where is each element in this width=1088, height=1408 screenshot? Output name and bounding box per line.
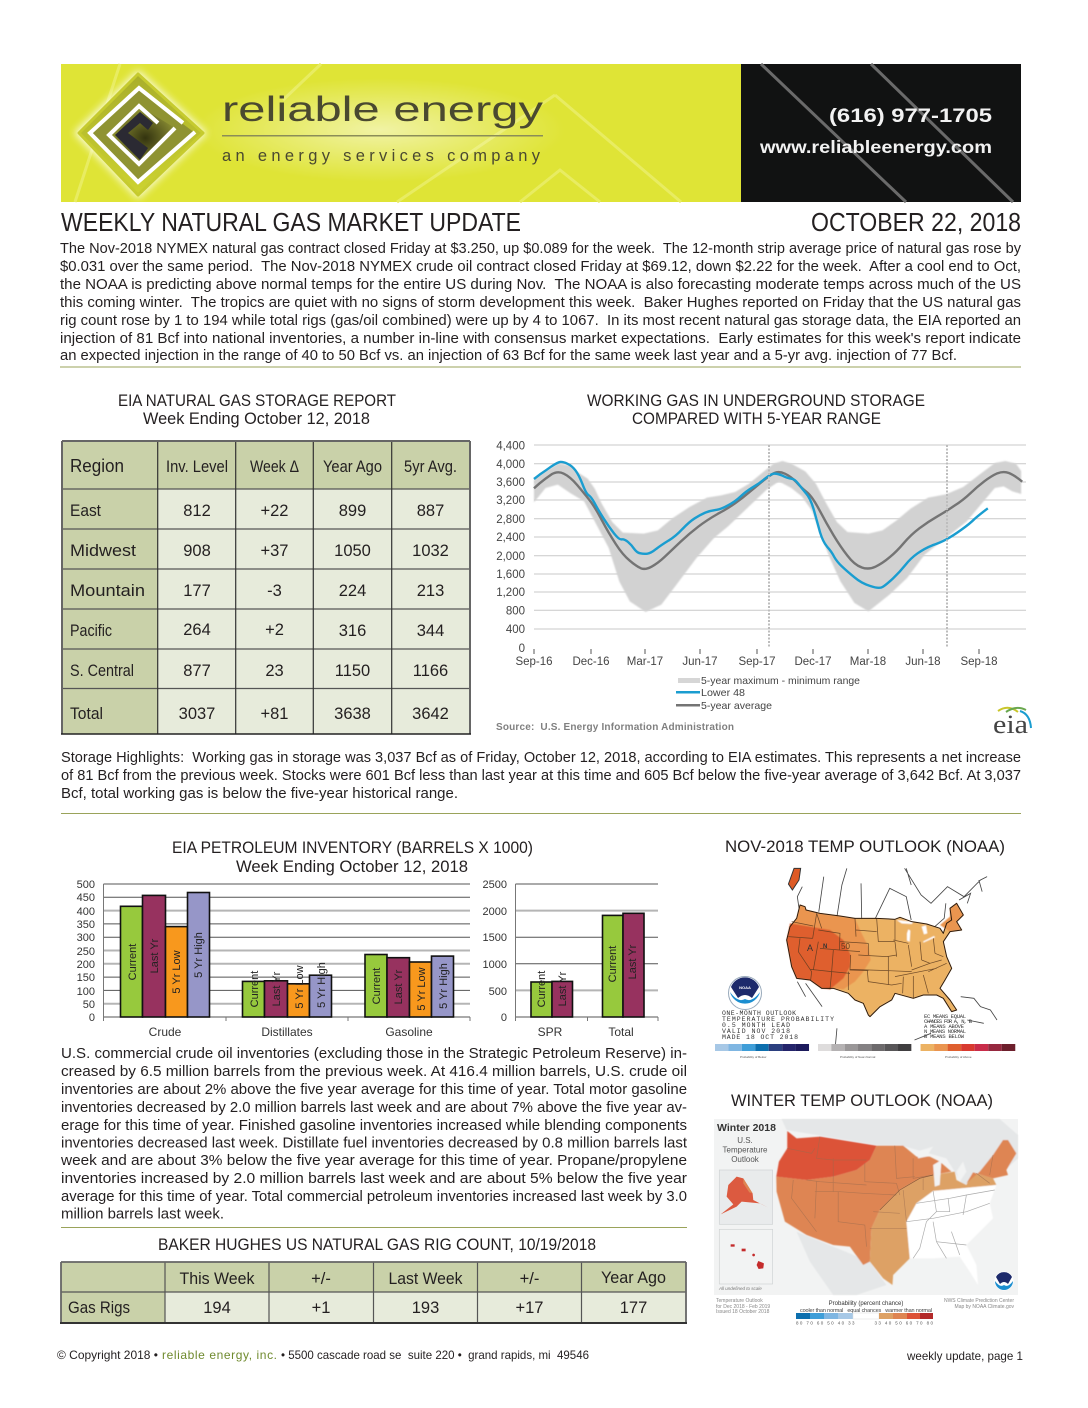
- bar chart: crude, distillates, gasoline: 200: [77, 959, 95, 971]
- table: storage by region: 177: [183, 582, 211, 600]
- icon: NOAA logo: [728, 976, 762, 1010]
- table: storage by region: Total: [70, 704, 103, 723]
- table: rig count: This Week: [180, 1270, 255, 1288]
- line chart: working gas vs 5-year range: Mar-18: [850, 656, 886, 668]
- table: rig count: +/-: [311, 1270, 331, 1288]
- petroleum commentary paragraph: U.S. commercial crude oil inventories (excluding those in the Strategic Petroleum Reserve) in-: [61, 1045, 687, 1062]
- bar chart: SPR and total: 1000: [483, 959, 507, 971]
- bar chart: crude, distillates, gasoline: Last Yr: [393, 969, 405, 1004]
- petroleum commentary paragraph: inventories decreased last week. Distillate fuel inventories decreased by 0.8 million barrels last: [61, 1134, 688, 1152]
- heading: rig count: BAKER HUGHES US NATURAL GAS RIG COUNT, 10/19/2018: [158, 1235, 596, 1254]
- map caption: TEMPERATURE PROBABILITY: [722, 1016, 834, 1023]
- table: rig count: +/-: [520, 1270, 539, 1288]
- line chart: working gas vs 5-year range: [496, 440, 1031, 739]
- line chart: working gas vs 5-year range: 400: [506, 624, 525, 636]
- heading: storage report: Week Ending October 12, 2018: [143, 409, 370, 428]
- table: rig count: Year Ago: [601, 1269, 666, 1287]
- bar chart: crude, distillates, gasoline: 5 Yr Low: [171, 950, 183, 994]
- bar chart: crude, distillates, gasoline: 5 Yr High: [438, 963, 450, 1009]
- contact panel: [741, 64, 1021, 202]
- table: storage by region: +22: [260, 502, 288, 520]
- probability scale: [796, 1301, 933, 1326]
- heading: working gas chart: COMPARED WITH 5-YEAR RANGE: [632, 409, 881, 428]
- line chart: working gas vs 5-year range: Dec-16: [572, 656, 610, 668]
- map title: Winter 2018: [717, 1122, 776, 1134]
- petroleum commentary paragraph: inventories are about 2% above the five year average for this time of year. Total motor gasoline: [61, 1081, 687, 1098]
- table: storage by region: East: [70, 501, 101, 520]
- table: storage by region: Midwest: [70, 541, 136, 560]
- table: rig count: Gas Rigs: [68, 1299, 130, 1317]
- table: storage by region: 1050: [334, 542, 371, 560]
- intro paragraph: injection of 81 Bcf into national inventories, a number in-line with consensus market expectations. Early estimates for this week's report indicate: [60, 330, 1021, 347]
- line chart: working gas vs 5-year range: Sep-18: [960, 656, 998, 668]
- line chart: working gas vs 5-year range: 2,800: [496, 514, 525, 526]
- table: storage by region: 316: [339, 622, 366, 640]
- map: November temperature outlook: [715, 868, 1015, 1059]
- map: November temperature outlook: 50: [841, 942, 850, 951]
- map key: EC MEANS EQUAL: [924, 1013, 966, 1020]
- map: November temperature outlook: A: [807, 943, 813, 953]
- table: storage by region: 224: [339, 582, 366, 600]
- bar chart: SPR and total: 500: [489, 986, 507, 998]
- petroleum commentary paragraph: creased by 6.5 million barrels from the previous week. At 416.4 million barrels, U.S. crude oil: [61, 1063, 687, 1080]
- storage highlights paragraph: Storage Highlights: Working gas in storage was 3,037 Bcf as of Friday, October 12, 2018, according to EIA estimates. This represents a net increase: [61, 749, 1021, 766]
- footer: copyright and address: © Copyright 2018 •: [57, 1348, 158, 1362]
- table: rig count: 194: [203, 1299, 231, 1317]
- line chart: working gas vs 5-year range: 0: [519, 643, 525, 655]
- table: storage by region: 264: [183, 621, 211, 639]
- map title: Temperature: [723, 1146, 768, 1154]
- table: storage by region: -3: [267, 582, 282, 600]
- bar chart: crude, distillates, gasoline: 5 Yr Low: [294, 965, 306, 1009]
- table: rig count: +17: [516, 1299, 544, 1317]
- map key: N MEANS NORMAL: [924, 1028, 966, 1035]
- table: storage by region: +37: [260, 542, 288, 560]
- bar chart: SPR and total: [483, 879, 658, 1039]
- probability scale: 80 70 60 50 40 33 33 40 50 60 70 80: [796, 1320, 933, 1326]
- bar chart: crude, distillates, gasoline: Last Yr: [149, 938, 161, 973]
- chart legend: [676, 675, 860, 712]
- intro paragraph: an expected injection in the range of 40 to 50 Bcf vs. an injection of 63 Bcf for the same week last year and a 5-yr avg. injection of 77 Bcf.: [60, 347, 957, 364]
- bar chart: SPR and total: 0: [501, 1012, 507, 1024]
- heading: storage report: EIA NATURAL GAS STORAGE REPORT: [118, 391, 396, 410]
- bar chart: SPR and total: Total: [608, 1025, 634, 1039]
- bar chart: SPR and total: 1500: [483, 932, 507, 944]
- intro paragraph: $0.031 over the same period. The Nov-2018 NYMEX crude oil contract closed Friday at $69.12, down $2.22 for the week. After a cool end to Oct,: [60, 258, 1021, 275]
- bar chart: crude, distillates, gasoline: Distillates: [261, 1025, 313, 1039]
- line chart: working gas vs 5-year range: 1,600: [496, 569, 525, 581]
- table: rig count: Last Week: [388, 1270, 463, 1288]
- line chart: working gas vs 5-year range: Mar-17: [627, 656, 663, 668]
- petroleum commentary paragraph: average for this time of year. Total commercial petroleum inventories increased last week by 3.0: [61, 1188, 687, 1205]
- table: storage by region: [61, 441, 471, 734]
- map title: [717, 1122, 776, 1291]
- petroleum commentary paragraph: week and are about 3% below the five year average for this time of year. Propane/propylene: [60, 1152, 687, 1169]
- heading: petroleum inventory: Week Ending October 12, 2018: [236, 857, 468, 876]
- company name: reliable energy: [222, 90, 544, 129]
- map caption: [722, 1010, 834, 1041]
- heading: winter outlook: WINTER TEMP OUTLOOK (NOAA): [731, 1091, 993, 1110]
- map caption: MADE 18 OCT 2018: [722, 1034, 798, 1041]
- petroleum commentary paragraph: [60, 1045, 688, 1222]
- table: storage by region: +81: [260, 705, 288, 723]
- website: www.reliableenergy.com: [759, 137, 992, 157]
- table: storage by region: +2: [265, 621, 284, 639]
- line chart: working gas vs 5-year range: 3,600: [496, 477, 525, 489]
- table: storage by region: Week Δ: [250, 458, 299, 476]
- table: storage by region: 213: [417, 582, 444, 600]
- table: storage by region: 3638: [334, 705, 371, 723]
- table: storage by region: Pacific: [70, 621, 112, 640]
- header banner: [61, 64, 741, 202]
- bar chart: crude, distillates, gasoline: 0: [89, 1012, 95, 1024]
- table: storage by region: 1032: [412, 542, 449, 560]
- line chart: working gas vs 5-year range: 1,200: [496, 587, 525, 599]
- bar chart: crude, distillates, gasoline: 5 Yr Low: [416, 967, 428, 1011]
- table: storage by region: 5yr Avg.: [404, 458, 457, 476]
- map: winter temperature outlook: [714, 1119, 1018, 1326]
- icon: eia logo: eia: [993, 710, 1029, 739]
- bar chart: SPR and total: 2000: [483, 906, 507, 918]
- table: rig count: 177: [620, 1299, 647, 1317]
- date: OCTOBER 22, 2018: [811, 207, 1021, 237]
- heading: storage report: [118, 391, 396, 428]
- bar chart: crude, distillates, gasoline: 400: [77, 906, 95, 918]
- probability colour bar: Probability of Above: [945, 1055, 972, 1059]
- probability scale: cooler than normal equal chances warmer than normal: [800, 1308, 932, 1314]
- petroleum commentary paragraph: million barrels last week.: [61, 1206, 224, 1222]
- bar chart: SPR and total: SPR: [538, 1025, 563, 1039]
- table: storage by region: 3642: [412, 705, 449, 723]
- bar chart: crude, distillates, gasoline: Current: [371, 968, 383, 1004]
- map key: [924, 1013, 973, 1040]
- map caption: 0.5 MONTH LEAD: [722, 1022, 790, 1029]
- footer: copyright and address: • 5500 cascade road se suite 220 • grand rapids, mi 49546: [281, 1348, 589, 1362]
- line chart: working gas vs 5-year range: Dec-17: [794, 656, 832, 668]
- intro paragraph: The Nov-2018 NYMEX natural gas contract closed Friday at $3.250, up $0.089 for the week. The 12-month strip average price of natural gas rose by: [60, 240, 1021, 257]
- intro paragraph: this coming winter. The tropics are quiet with no signs of storm development this week. Baker Hughes reported on Friday that the US natural gas: [60, 294, 1021, 311]
- bar chart: crude, distillates, gasoline: [77, 879, 470, 1039]
- intro paragraph: rig count rose by 1 to 194 while total rigs (gas/oil combined) were up by 4 to 1067. In its most recent natural gas storage data, the EIA reported an: [60, 312, 1021, 329]
- bar chart: crude, distillates, gasoline: 5 Yr High: [316, 962, 328, 1008]
- table: storage by region: Region: [70, 456, 124, 476]
- table: storage by region: 344: [417, 622, 444, 640]
- footer: copyright and address: [57, 1348, 589, 1362]
- probability colour bar: [715, 1044, 1015, 1059]
- bar chart: SPR and total: 2500: [483, 879, 507, 891]
- line chart: working gas vs 5-year range: Sep-16: [515, 656, 553, 668]
- table: storage by region: 1150: [335, 662, 370, 680]
- line chart: working gas vs 5-year range: Jun-17: [682, 656, 718, 668]
- map title: Outlook: [731, 1155, 760, 1164]
- table: storage by region: 1166: [413, 662, 448, 680]
- table: storage by region: Inv. Level: [166, 458, 228, 476]
- bar chart: crude, distillates, gasoline: 50: [83, 999, 95, 1011]
- map caption: ONE-MONTH OUTLOOK: [722, 1010, 796, 1017]
- line chart: working gas vs 5-year range: 2,400: [496, 532, 525, 544]
- probability colour bar: Probability of Near-Normal: [840, 1055, 876, 1059]
- source note: Source: U.S. Energy Information Administration: [496, 722, 734, 733]
- storage highlights paragraph: [61, 749, 1021, 802]
- map notes: for Dec 2018 - Feb 2019: [716, 1304, 770, 1310]
- table: rig count: 193: [412, 1299, 439, 1317]
- map caption: VALID NOV 2018: [722, 1028, 790, 1035]
- map notes: NWS Climate Prediction Center: [944, 1298, 1014, 1304]
- storage highlights paragraph: of 81 Bcf from the previous week. Stocks were 601 Bcf less than last year at this time and 605 Bcf below the five-year average of 3,642 Bcf. At 3,037: [61, 767, 1021, 784]
- bar chart: SPR and total: Last Yr: [627, 944, 639, 979]
- table: storage by region: 23: [265, 662, 284, 680]
- tagline: an energy services company: [222, 147, 541, 165]
- table: storage by region: 887: [417, 502, 444, 520]
- petroleum commentary paragraph: erage for this time of year. Finished gasoline inventories increased while blending components: [61, 1117, 687, 1134]
- bar chart: crude, distillates, gasoline: Last Yr: [271, 971, 283, 1006]
- map notes: Issued 18 October 2018: [716, 1309, 770, 1315]
- heading: working gas chart: WORKING GAS IN UNDERGROUND STORAGE: [587, 391, 925, 410]
- map key: A MEANS ABOVE: [924, 1023, 965, 1030]
- bar chart: SPR and total: Current: [607, 946, 619, 982]
- heading: working gas chart: [587, 391, 925, 428]
- probability scale: Probability (percent chance): [829, 1301, 903, 1307]
- map title: U.S.: [737, 1136, 753, 1145]
- bar chart: crude, distillates, gasoline: 100: [77, 986, 95, 998]
- table: storage by region: Year Ago: [323, 458, 382, 476]
- petroleum commentary paragraph: inventories decreased by 2.0 million barrels last week and are about 7% above the five year av-: [61, 1099, 687, 1116]
- bar chart: crude, distillates, gasoline: Crude: [149, 1025, 182, 1039]
- line chart: working gas vs 5-year range: Jun-18: [905, 656, 941, 668]
- bar chart: crude, distillates, gasoline: 150: [77, 972, 95, 984]
- heading: petroleum inventory: EIA PETROLEUM INVENTORY (BARRELS X 1000): [172, 838, 533, 857]
- bar chart: crude, distillates, gasoline: 500: [77, 879, 95, 891]
- table: storage by region: 908: [183, 542, 211, 560]
- chart legend: 5-year maximum - minimum range: [701, 675, 860, 687]
- line chart: working gas vs 5-year range: 4,000: [496, 459, 525, 471]
- footer: page number: weekly update, page 1: [906, 1349, 1023, 1363]
- logo: diamond mark: [74, 70, 207, 199]
- phone: (616) 977-1705: [829, 106, 993, 127]
- line chart: working gas vs 5-year range: 4,400: [496, 440, 525, 452]
- heading: petroleum inventory: [172, 838, 533, 876]
- table: storage by region: 877: [183, 662, 211, 680]
- bar chart: crude, distillates, gasoline: Current: [249, 971, 261, 1007]
- bar chart: crude, distillates, gasoline: 350: [77, 919, 95, 931]
- bar chart: crude, distillates, gasoline: Current: [127, 944, 139, 980]
- probability colour bar: Probability of Below: [740, 1055, 767, 1059]
- line chart: working gas vs 5-year range: 800: [506, 606, 525, 618]
- bar chart: crude, distillates, gasoline: 250: [77, 946, 95, 958]
- map title: All undefined to scale: [718, 1286, 762, 1291]
- bar chart: crude, distillates, gasoline: Gasoline: [385, 1025, 433, 1039]
- map notes: Temperature Outlook: [716, 1298, 763, 1304]
- map: November temperature outlook: N: [823, 944, 827, 950]
- title: WEEKLY NATURAL GAS MARKET UPDATE: [61, 207, 521, 237]
- icon: NOAA logo: [994, 1272, 1014, 1290]
- chart legend: Lower 48: [701, 687, 745, 699]
- line chart: working gas vs 5-year range: Sep-17: [738, 656, 776, 668]
- table: storage by region: 3037: [179, 705, 215, 723]
- map notes: Map by NOAA Climate.gov: [955, 1304, 1014, 1310]
- line chart: working gas vs 5-year range: 2,000: [496, 551, 525, 563]
- petroleum commentary paragraph: inventories increased by 2.0 million barrels last week and are about 5% below the five year: [61, 1170, 687, 1187]
- map key: B MEANS BELOW: [924, 1033, 965, 1040]
- intro paragraph: the NOAA is predicting above normal temps for the entire US during Nov. The NOAA is also forecasting moderate temps across much of the US: [60, 276, 1021, 293]
- footer: copyright and address: reliable energy, inc.: [162, 1348, 277, 1362]
- table: storage by region: S. Central: [70, 661, 134, 680]
- chart legend: 5-year average: [701, 700, 772, 712]
- table: rig count: [60, 1262, 687, 1323]
- table: storage by region: 899: [339, 502, 366, 520]
- bar chart: SPR and total: Last Yr: [557, 971, 569, 1006]
- storage highlights paragraph: Bcf, total working gas is below the five-year historical range.: [61, 785, 458, 802]
- bar chart: SPR and total: Current: [536, 971, 548, 1007]
- bar chart: crude, distillates, gasoline: 300: [77, 932, 95, 944]
- map notes: [716, 1298, 1014, 1315]
- line chart: working gas vs 5-year range: 3,200: [496, 495, 525, 507]
- bar chart: crude, distillates, gasoline: 450: [77, 892, 95, 904]
- table: storage by region: 812: [183, 502, 211, 520]
- heading: November outlook: NOV-2018 TEMP OUTLOOK (NOAA): [725, 837, 1005, 856]
- map key: CHANCES FOR A, N, B: [924, 1018, 973, 1025]
- bar chart: crude, distillates, gasoline: 5 Yr High: [193, 932, 205, 978]
- table: storage by region: Mountain: [70, 581, 145, 600]
- intro paragraph: [60, 240, 1021, 364]
- icon: NOAA logo: NOAA: [739, 985, 751, 990]
- table: rig count: +1: [312, 1299, 330, 1317]
